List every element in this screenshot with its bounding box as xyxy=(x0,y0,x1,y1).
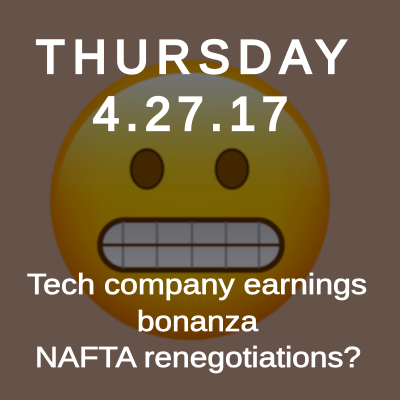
headline: NAFTA: NAFTA renegotiations? xyxy=(35,342,361,374)
title: day: THURSDAY xyxy=(36,30,347,83)
title: date: 4.27.17 xyxy=(93,87,288,140)
headline: bonanza: bonanza xyxy=(137,306,259,338)
headline list xyxy=(27,269,367,374)
face circle xyxy=(50,60,330,340)
headline: tech earnings: Tech company earnings xyxy=(27,269,367,301)
face highlight xyxy=(57,73,323,327)
right eye xyxy=(216,150,248,188)
left eye xyxy=(131,150,163,188)
icon: grimacing face emoji xyxy=(50,60,330,340)
grimacing mouth xyxy=(100,220,282,270)
